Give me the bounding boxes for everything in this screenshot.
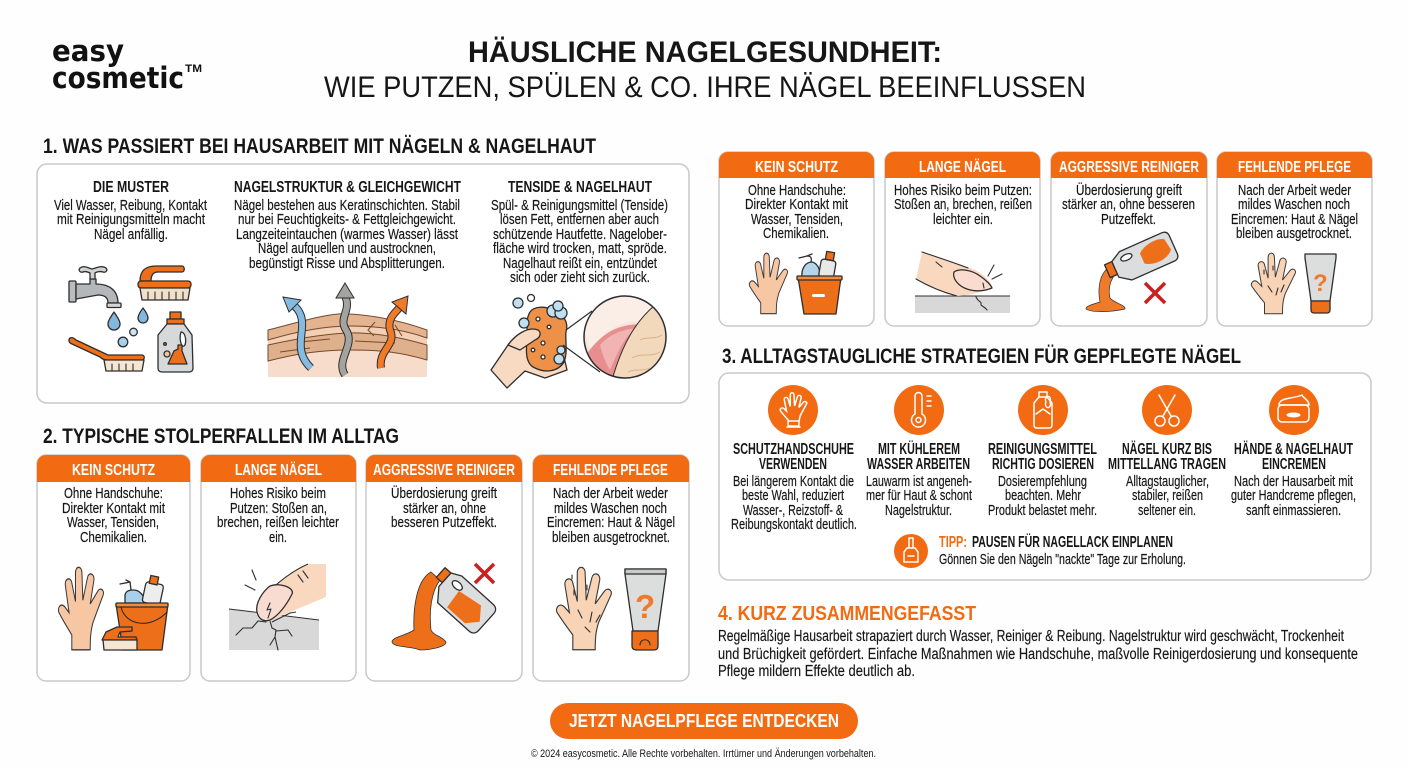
card: lange Nägel (right): Hohes Risiko beim Putzen: xyxy=(894,183,1032,199)
icon: bucket with products xyxy=(797,251,842,314)
logo: easy xyxy=(52,34,124,68)
strategy: kühleres Wasser: Nagelstruktur. xyxy=(885,503,952,519)
icon: water drops and bubbles xyxy=(108,308,148,347)
card: fehlende Pflege (left): bleiben ausgetrocknet. xyxy=(552,530,670,546)
illustration: hand with sponge xyxy=(491,294,600,388)
diagram: nail layers with arrows xyxy=(268,283,427,377)
strategy: Nägel kurz: MITTELLANG TRAGEN xyxy=(1108,456,1226,473)
card: lange Nägel (left): brechen, reißen leichter xyxy=(217,515,339,531)
heading: section 3: 3. ALLTAGSTAUGLICHE STRATEGIEN FÜR GEPFLEGTE NÄGEL xyxy=(722,345,1241,368)
strategy: kühleres Wasser: WASSER ARBEITEN xyxy=(867,456,970,473)
strategy: eincremen: sanft einmassieren. xyxy=(1246,503,1341,519)
icon: bare hand xyxy=(58,567,104,650)
card: fehlende Pflege (right) xyxy=(1217,152,1372,326)
card: fehlende Pflege (left) xyxy=(533,455,689,681)
icon: thermometer xyxy=(894,385,944,435)
text block: Nagelstruktur: Nägel bestehen aus Keratinschichten. Stabil xyxy=(234,198,460,214)
strategy: dosieren: Produkt belastet mehr. xyxy=(988,503,1097,519)
text block: die Muster: Nägel anfällig. xyxy=(94,227,168,243)
logo: TM xyxy=(185,63,202,75)
card: kein Schutz (right): Wasser, Tensiden, xyxy=(751,212,843,228)
illustration: finger hitting edge xyxy=(915,252,1010,313)
strategy: Schutzhandschuhe: SCHUTZHANDSCHUHE xyxy=(733,441,854,458)
card: kein Schutz (right): KEIN SCHUTZ xyxy=(755,159,838,176)
card: lange Nägel (right) xyxy=(885,152,1040,326)
strategy: Schutzhandschuhe: Reibungskontakt deutlich. xyxy=(731,517,857,533)
icon: scrub brush xyxy=(138,266,191,300)
text block: Tenside: sich oder zieht sich zurück. xyxy=(510,270,650,286)
text block: Nagelstruktur: Nägel aufquellen und austrocknen, xyxy=(258,241,436,257)
text block: die Muster: DIE MUSTER xyxy=(93,179,169,196)
strategy: dosieren: RICHTIG DOSIEREN xyxy=(992,456,1094,473)
text block: die Muster: mit Reinigungsmitteln macht xyxy=(57,212,205,228)
strategy: eincremen: guter Handcreme pflegen, xyxy=(1231,488,1356,504)
card: lange Nägel (right): Stoßen an, brechen, reißen xyxy=(894,197,1032,213)
tip: TIPP: xyxy=(939,534,967,551)
icon: red cross xyxy=(475,564,494,583)
card: kein Schutz (right): Ohne Handschuhe: xyxy=(748,183,846,199)
tip: Gönnen Sie den Nägeln "nackte" Tage zur Erholung. xyxy=(939,552,1186,568)
icon: bucket with products xyxy=(102,575,168,650)
text block: Tenside: fläche wird trocken, matt, spröde. xyxy=(493,241,667,257)
logo: cosmetic xyxy=(52,61,184,95)
icon: faucet xyxy=(69,267,121,308)
card: aggressive Reiniger (left) xyxy=(366,455,522,681)
text block: die Muster xyxy=(54,179,207,243)
strategy: kühleres Wasser: Lauwarm ist angeneh- xyxy=(866,474,972,490)
card: lange Nägel (left): Putzen: Stoßen an, xyxy=(230,501,327,517)
card: kein Schutz (left): Direkter Kontakt mit xyxy=(62,501,165,517)
text block: summary xyxy=(718,628,1358,680)
card: aggressive Reiniger (right): Putzeffekt. xyxy=(1101,212,1156,228)
text block: summary: Pflege mildern Effekte deutlich ab. xyxy=(718,663,915,680)
title xyxy=(324,36,1086,104)
strategy: eincremen: EINCREMEN xyxy=(1262,456,1326,473)
heading: section 4: 4. KURZ ZUSAMMENGEFASST xyxy=(718,603,976,625)
card: fehlende Pflege (right): mildes Waschen noch xyxy=(1238,197,1350,213)
card: kein Schutz (left): Wasser, Tensiden, xyxy=(67,515,159,531)
strategy: Nägel kurz: NÄGEL KURZ BIS xyxy=(1122,441,1212,458)
icon: dry hand xyxy=(1251,253,1296,314)
card: lange Nägel (right): LANGE NÄGEL xyxy=(919,159,1006,176)
card: aggressive Reiniger (right): Überdosierung greift xyxy=(1076,181,1182,199)
strategy: Nägel kurz xyxy=(1108,385,1226,519)
card: fehlende Pflege (left): Nach der Arbeit weder xyxy=(553,486,668,502)
card: aggressive Reiniger (left): Überdosierung greift xyxy=(391,484,497,502)
text block: Nagelstruktur xyxy=(234,179,461,272)
strategy: Schutzhandschuhe xyxy=(731,385,857,533)
icon: long brush xyxy=(69,338,144,371)
strategy: Nägel kurz: stabiler, reißen xyxy=(1132,488,1203,504)
strategy: dosieren: beachten. Mehr xyxy=(1005,488,1081,504)
text block: Tenside xyxy=(491,179,668,286)
card: fehlende Pflege (right): ? xyxy=(1313,270,1328,297)
text block: Tenside: Nagelhaut reißt ein, entzündet xyxy=(503,256,657,272)
card: aggressive Reiniger (right) xyxy=(1051,152,1207,326)
strategy: kühleres Wasser: MIT KÜHLEREM xyxy=(878,441,960,458)
strategy: eincremen xyxy=(1231,385,1356,519)
card: fehlende Pflege (left): mildes Waschen noch xyxy=(554,501,667,517)
icon: scissors xyxy=(1142,385,1192,435)
text block: Tenside: Spül- & Reinigungsmittel (Tenside) xyxy=(491,198,668,214)
card: fehlende Pflege (left): ? xyxy=(635,588,655,625)
arrow: orange xyxy=(381,296,408,368)
button: call to action: JETZT NAGELPFLEGE ENTDECKEN xyxy=(569,711,839,731)
panel: was passiert xyxy=(37,164,689,403)
card: kein Schutz (right): Direkter Kontakt mit xyxy=(745,197,848,213)
icon: empty cream tube xyxy=(625,569,666,650)
card: fehlende Pflege (left): Eincremen: Haut & Nägel xyxy=(547,515,675,531)
icon: cleaning bottle xyxy=(158,312,193,372)
footer: © 2024 easycosmetic. Alle Rechte vorbehalten. Irrtümer und Änderungen vorbehalten. xyxy=(531,748,876,760)
text block: Nagelstruktur: begünstigt Risse und Absplitterungen. xyxy=(249,256,445,272)
text block: Nagelstruktur: nur bei Feuchtigkeits- & Fettgleichgewicht. xyxy=(238,212,456,228)
text block: Nagelstruktur: NAGELSTRUKTUR & GLEICHGEWICHT xyxy=(234,179,461,196)
arrow: grey xyxy=(336,283,354,375)
card: aggressive Reiniger (right): AGGRESSIVE REINIGER xyxy=(1059,159,1199,176)
icon: dry hand xyxy=(557,567,611,650)
card: lange Nägel (left): ein. xyxy=(269,530,287,546)
title: HÄUSLICHE NAGELGESUNDHEIT: xyxy=(468,36,942,69)
card: kein Schutz (left): KEIN SCHUTZ xyxy=(72,462,155,479)
card: kein Schutz (left): Ohne Handschuhe: xyxy=(64,486,163,502)
logo xyxy=(52,34,202,95)
text block: Tenside: lösen Fett, entfernen aber auch xyxy=(500,212,659,228)
strategy: kühleres Wasser: mer für Haut & schont xyxy=(866,488,972,504)
icon: cream jar xyxy=(1269,385,1319,435)
card: lange Nägel (left): LANGE NÄGEL xyxy=(235,462,322,479)
icon: nail polish xyxy=(894,534,928,568)
card: fehlende Pflege (right): FEHLENDE PFLEGE xyxy=(1238,159,1351,176)
card: fehlende Pflege (right): Nach der Arbeit weder xyxy=(1238,183,1351,199)
tip xyxy=(894,534,1186,568)
strategy: dosieren: REINIGUNGSMITTEL xyxy=(988,441,1097,458)
panel: strategien xyxy=(719,373,1371,580)
icon: bare hand xyxy=(749,253,788,314)
tip: PAUSEN FÜR NAGELLACK EINPLANEN xyxy=(972,534,1173,551)
illustration: magnified cuticle xyxy=(583,295,667,379)
card: fehlende Pflege (right): bleiben ausgetrocknet. xyxy=(1236,226,1352,242)
text block: die Muster: Viel Wasser, Reibung, Kontakt xyxy=(54,198,207,214)
card: fehlende Pflege (left): FEHLENDE PFLEGE xyxy=(553,462,668,479)
strategy: Schutzhandschuhe: Wasser-, Reizstoff- & xyxy=(743,503,843,519)
card: kein Schutz (left) xyxy=(37,455,190,681)
card: kein Schutz (left): Chemikalien. xyxy=(80,530,147,546)
card: lange Nägel (left) xyxy=(201,455,356,681)
strategy: kühleres Wasser xyxy=(866,385,972,519)
icon: glove xyxy=(768,385,818,435)
card: lange Nägel (right): leichter ein. xyxy=(933,212,993,228)
card: fehlende Pflege (right): Eincremen: Haut & Nägel xyxy=(1231,212,1358,228)
card: aggressive Reiniger (left): stärker an, ohne xyxy=(403,501,486,517)
card: aggressive Reiniger (right): stärker an, ohne besseren xyxy=(1062,197,1195,213)
card: aggressive Reiniger (left): AGGRESSIVE REINIGER xyxy=(373,462,515,479)
text block: Nagelstruktur: Langzeiteintauchen (warmes Wasser) lässt xyxy=(236,227,458,243)
card: lange Nägel (left): Hohes Risiko beim xyxy=(230,486,326,502)
card: aggressive Reiniger (left): besseren Putzeffekt. xyxy=(391,515,497,531)
strategy: dosieren xyxy=(988,385,1097,519)
icon: empty cream tube xyxy=(1305,254,1336,313)
illustration: spilling bottle xyxy=(1086,230,1180,312)
text block: Tenside: schützende Hautfette. Nagelober- xyxy=(493,227,667,243)
card: kein Schutz (right) xyxy=(719,152,874,326)
strategy: eincremen: Nach der Hausarbeit mit xyxy=(1234,474,1353,490)
strategy: Schutzhandschuhe: VERWENDEN xyxy=(759,456,827,473)
strategy: dosieren: Dosierempfehlung xyxy=(998,474,1087,490)
strategy: Nägel kurz: seltener ein. xyxy=(1138,503,1196,519)
arrow: blue xyxy=(283,297,311,368)
illustration: cracked surface and finger xyxy=(229,564,326,650)
strategy: Schutzhandschuhe: Bei längerem Kontakt die xyxy=(733,474,854,490)
icon: red cross xyxy=(1145,283,1165,303)
card: kein Schutz (right): Chemikalien. xyxy=(763,226,829,242)
strategy: Nägel kurz: Alltagstauglicher, xyxy=(1126,474,1209,490)
icon: detergent bottle xyxy=(1018,385,1068,435)
text block: Tenside: TENSIDE & NAGELHAUT xyxy=(508,179,652,196)
illustration: spilling bottle xyxy=(392,564,498,650)
title: WIE PUTZEN, SPÜLEN & CO. IHRE NÄGEL BEEINFLUSSEN xyxy=(324,71,1086,104)
button: call to action xyxy=(550,703,858,739)
strategy: eincremen: HÄNDE & NAGELHAUT xyxy=(1234,441,1353,458)
strategy: Schutzhandschuhe: beste Wahl, reduziert xyxy=(742,488,844,504)
heading: section 2: 2. TYPISCHE STOLPERFALLEN IM ALLTAG xyxy=(43,425,399,448)
heading: section 1: 1. WAS PASSIERT BEI HAUSARBEIT MIT NÄGELN & NAGELHAUT xyxy=(43,135,596,158)
